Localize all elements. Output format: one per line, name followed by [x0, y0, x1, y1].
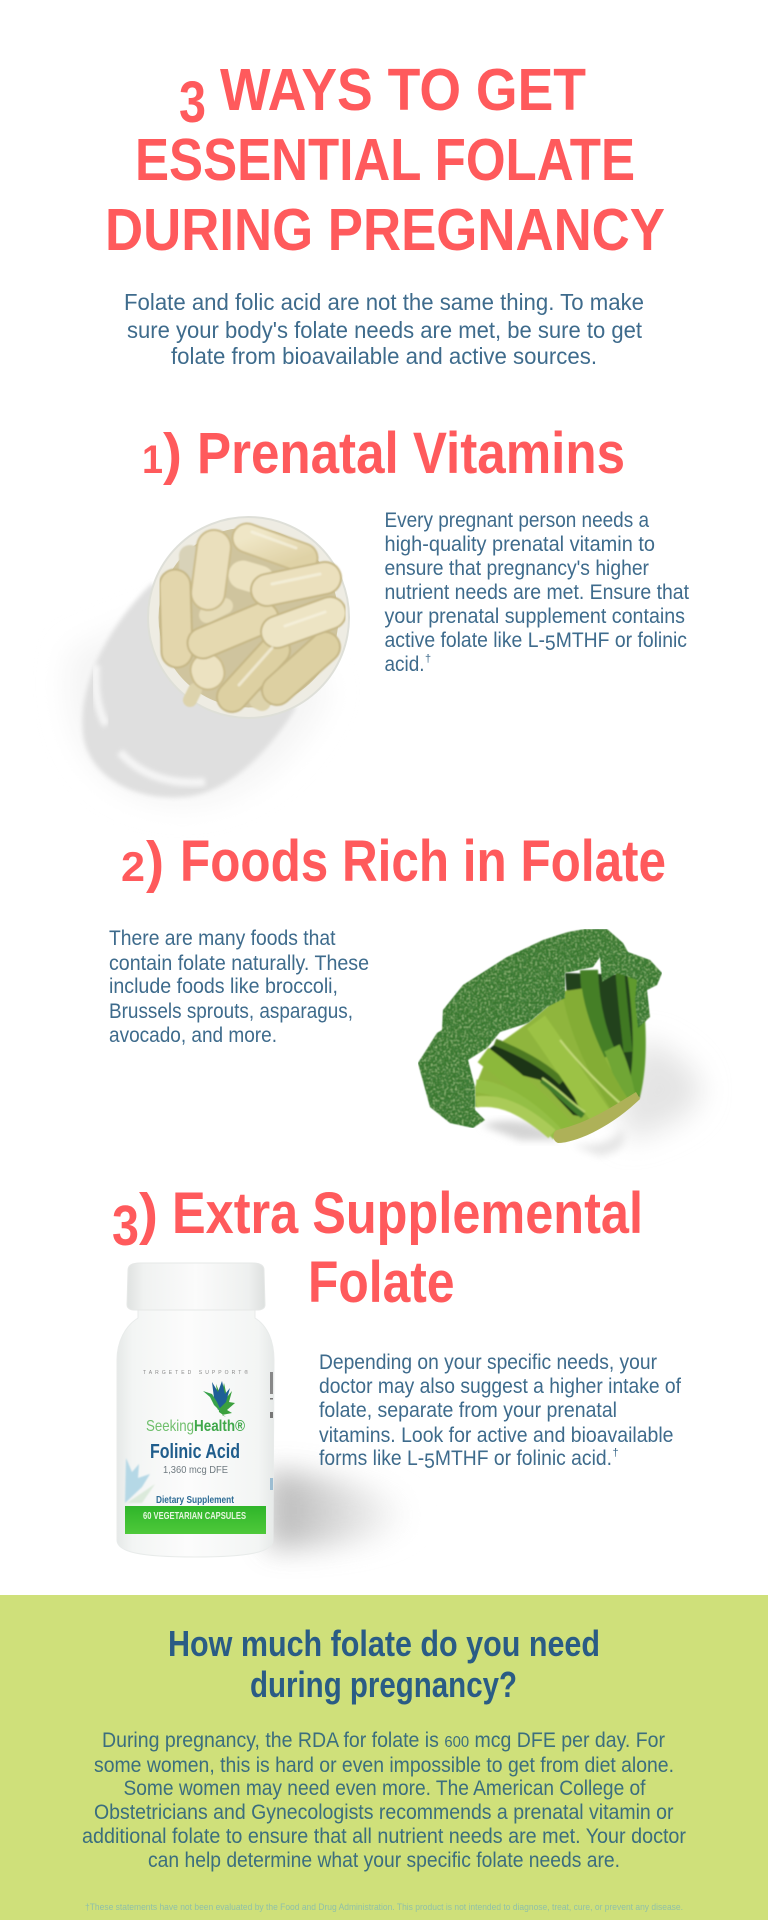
- heading: 2) Foods Rich in Folate: 2: [121, 843, 145, 890]
- panel body text: Some women may need even more. The American College of: [124, 1777, 646, 1800]
- bird logo: [203, 1381, 235, 1417]
- paragraph: prenatal vitamins: †: [425, 653, 431, 665]
- paragraph: prenatal vitamins: ensure that pregnancy's higher: [384, 557, 649, 580]
- paragraph: extra supplemental folate: †: [612, 1447, 619, 1459]
- intro text: sure your body's folate needs are met, be sure to get: [127, 317, 642, 343]
- bowl shadow: [66, 580, 330, 805]
- paragraph: prenatal vitamins: acid.: [384, 653, 424, 676]
- heading: 2) Foods Rich in Folate: ): [146, 830, 164, 894]
- footnote: †These statements have not been evaluated by the Food and Drug Administration. This product is not intended to diagnose, treat, cure, or prevent any disease.: [85, 1902, 683, 1913]
- intro text: folate from bioavailable and active sources.: [171, 343, 597, 369]
- panel body text: some women, this is hard or even impossible to get from diet alone.: [94, 1754, 674, 1777]
- paragraph: extra supplemental folate: vitamins. Look for active and bioavailable: [319, 1424, 674, 1447]
- bottle cap: [127, 1263, 265, 1310]
- title: WAYS TO GET: [220, 57, 586, 123]
- label text: [143, 1369, 248, 1522]
- heading: 2) Foods Rich in Folate: Foods Rich in Folate: [180, 829, 666, 894]
- panel body text: additional folate to ensure that all nutrient needs are met. Your doctor: [82, 1825, 686, 1848]
- panel heading: during pregnancy?: [250, 1664, 517, 1705]
- intro text: [124, 289, 644, 369]
- paragraph: extra supplemental folate: MTHF or folinic acid.: [435, 1447, 612, 1470]
- paragraph: prenatal vitamins: MTHF or folinic: [556, 629, 687, 652]
- right side label marks: [270, 1372, 273, 1490]
- label text: TARGETED SUPPORT®: [143, 1369, 248, 1376]
- paragraph: extra supplemental folate: [319, 1351, 681, 1473]
- band: [125, 1506, 266, 1534]
- paragraph: foods rich in folate: Brussels sprouts, asparagus,: [109, 1000, 353, 1023]
- paragraph: prenatal vitamins: Every pregnant person needs a: [384, 509, 649, 532]
- label text: 1,360 mcg DFE: [163, 1464, 228, 1476]
- paragraph: prenatal vitamins: active folate like L-: [384, 629, 558, 652]
- panel body text: Obstetricians and Gynecologists recommends a prenatal vitamin or: [94, 1801, 674, 1824]
- cut stem base: [553, 1092, 640, 1143]
- paragraph: extra supplemental folate: folate, separate from your prenatal: [319, 1399, 617, 1422]
- image: bowl of capsules with shadow: [66, 517, 349, 805]
- broccoli crown: [418, 929, 662, 1128]
- paragraph: foods rich in folate: [109, 927, 369, 1047]
- paragraph: extra supplemental folate: doctor may also suggest a higher intake of: [319, 1375, 681, 1398]
- bottle body: [117, 1305, 274, 1557]
- paragraph: prenatal vitamins: 5: [545, 632, 556, 655]
- heading: 3) Extra Supplemental Folate: [112, 1181, 643, 1315]
- paragraph: foods rich in folate: There are many foods that: [109, 927, 336, 950]
- paragraph: prenatal vitamins: nutrient needs are met. Ensure that: [384, 581, 689, 604]
- image: broccoli: [418, 929, 700, 1156]
- label text: Health®: [194, 1418, 245, 1435]
- title: 3: [179, 70, 206, 135]
- panel body text: During pregnancy, the RDA for folate is 600 mcg DFE per day. For: [102, 1729, 665, 1752]
- paragraph: extra supplemental folate: forms like L-: [319, 1447, 433, 1470]
- label text: Dietary Supplement: [156, 1495, 235, 1506]
- heading: 3) Extra Supplemental Folate: Folate: [308, 1250, 454, 1315]
- paragraph: foods rich in folate: include foods like broccoli,: [109, 975, 338, 998]
- label text: Seeking: [146, 1418, 194, 1435]
- panel body text: can help determine what your specific folate needs are.: [148, 1849, 620, 1872]
- paragraph: extra supplemental folate: Depending on your specific needs, your: [319, 1351, 657, 1374]
- title: [105, 57, 665, 263]
- heading: 3) Extra Supplemental Folate: ): [139, 1182, 158, 1246]
- panel heading: [168, 1623, 600, 1705]
- label text: 60 VEGETARIAN CAPSULES: [143, 1511, 246, 1522]
- bottle shadow: [268, 1470, 410, 1548]
- paragraph: prenatal vitamins: your prenatal supplement contains: [384, 605, 685, 628]
- image: supplement bottle: [117, 1263, 410, 1557]
- label leaf graphic: [125, 1458, 155, 1503]
- heading: 1) Prenatal Vitamins: ): [163, 422, 182, 486]
- paragraph: foods rich in folate: contain folate naturally. These: [109, 952, 369, 975]
- intro text: Folate and folic acid are not the same thing. To make: [124, 289, 644, 315]
- heading: 1) Prenatal Vitamins: Prenatal Vitamins: [197, 421, 625, 486]
- stems: [475, 970, 640, 1142]
- heading: 3) Extra Supplemental Folate: Extra Supplemental: [172, 1181, 643, 1246]
- capsules: [175, 532, 330, 702]
- label text: Folinic Acid: [150, 1440, 240, 1463]
- paragraph: foods rich in folate: avocado, and more.: [109, 1024, 277, 1047]
- title: ESSENTIAL FOLATE: [135, 127, 635, 193]
- panel heading: How much folate do you need: [168, 1623, 600, 1664]
- heading: 3) Extra Supplemental Folate: 3: [112, 1194, 139, 1258]
- panel body text: [82, 1729, 686, 1872]
- paragraph: extra supplemental folate: 5: [424, 1450, 435, 1473]
- glass bowl: [148, 517, 349, 718]
- broccoli shadow: [482, 1040, 700, 1156]
- title: DURING PREGNANCY: [105, 197, 665, 263]
- panel: how much folate: [0, 1595, 768, 1920]
- paragraph: prenatal vitamins: high-quality prenatal vitamin to: [384, 533, 655, 556]
- paragraph: prenatal vitamins: [384, 509, 689, 676]
- heading: 1) Prenatal Vitamins: 1: [142, 438, 163, 482]
